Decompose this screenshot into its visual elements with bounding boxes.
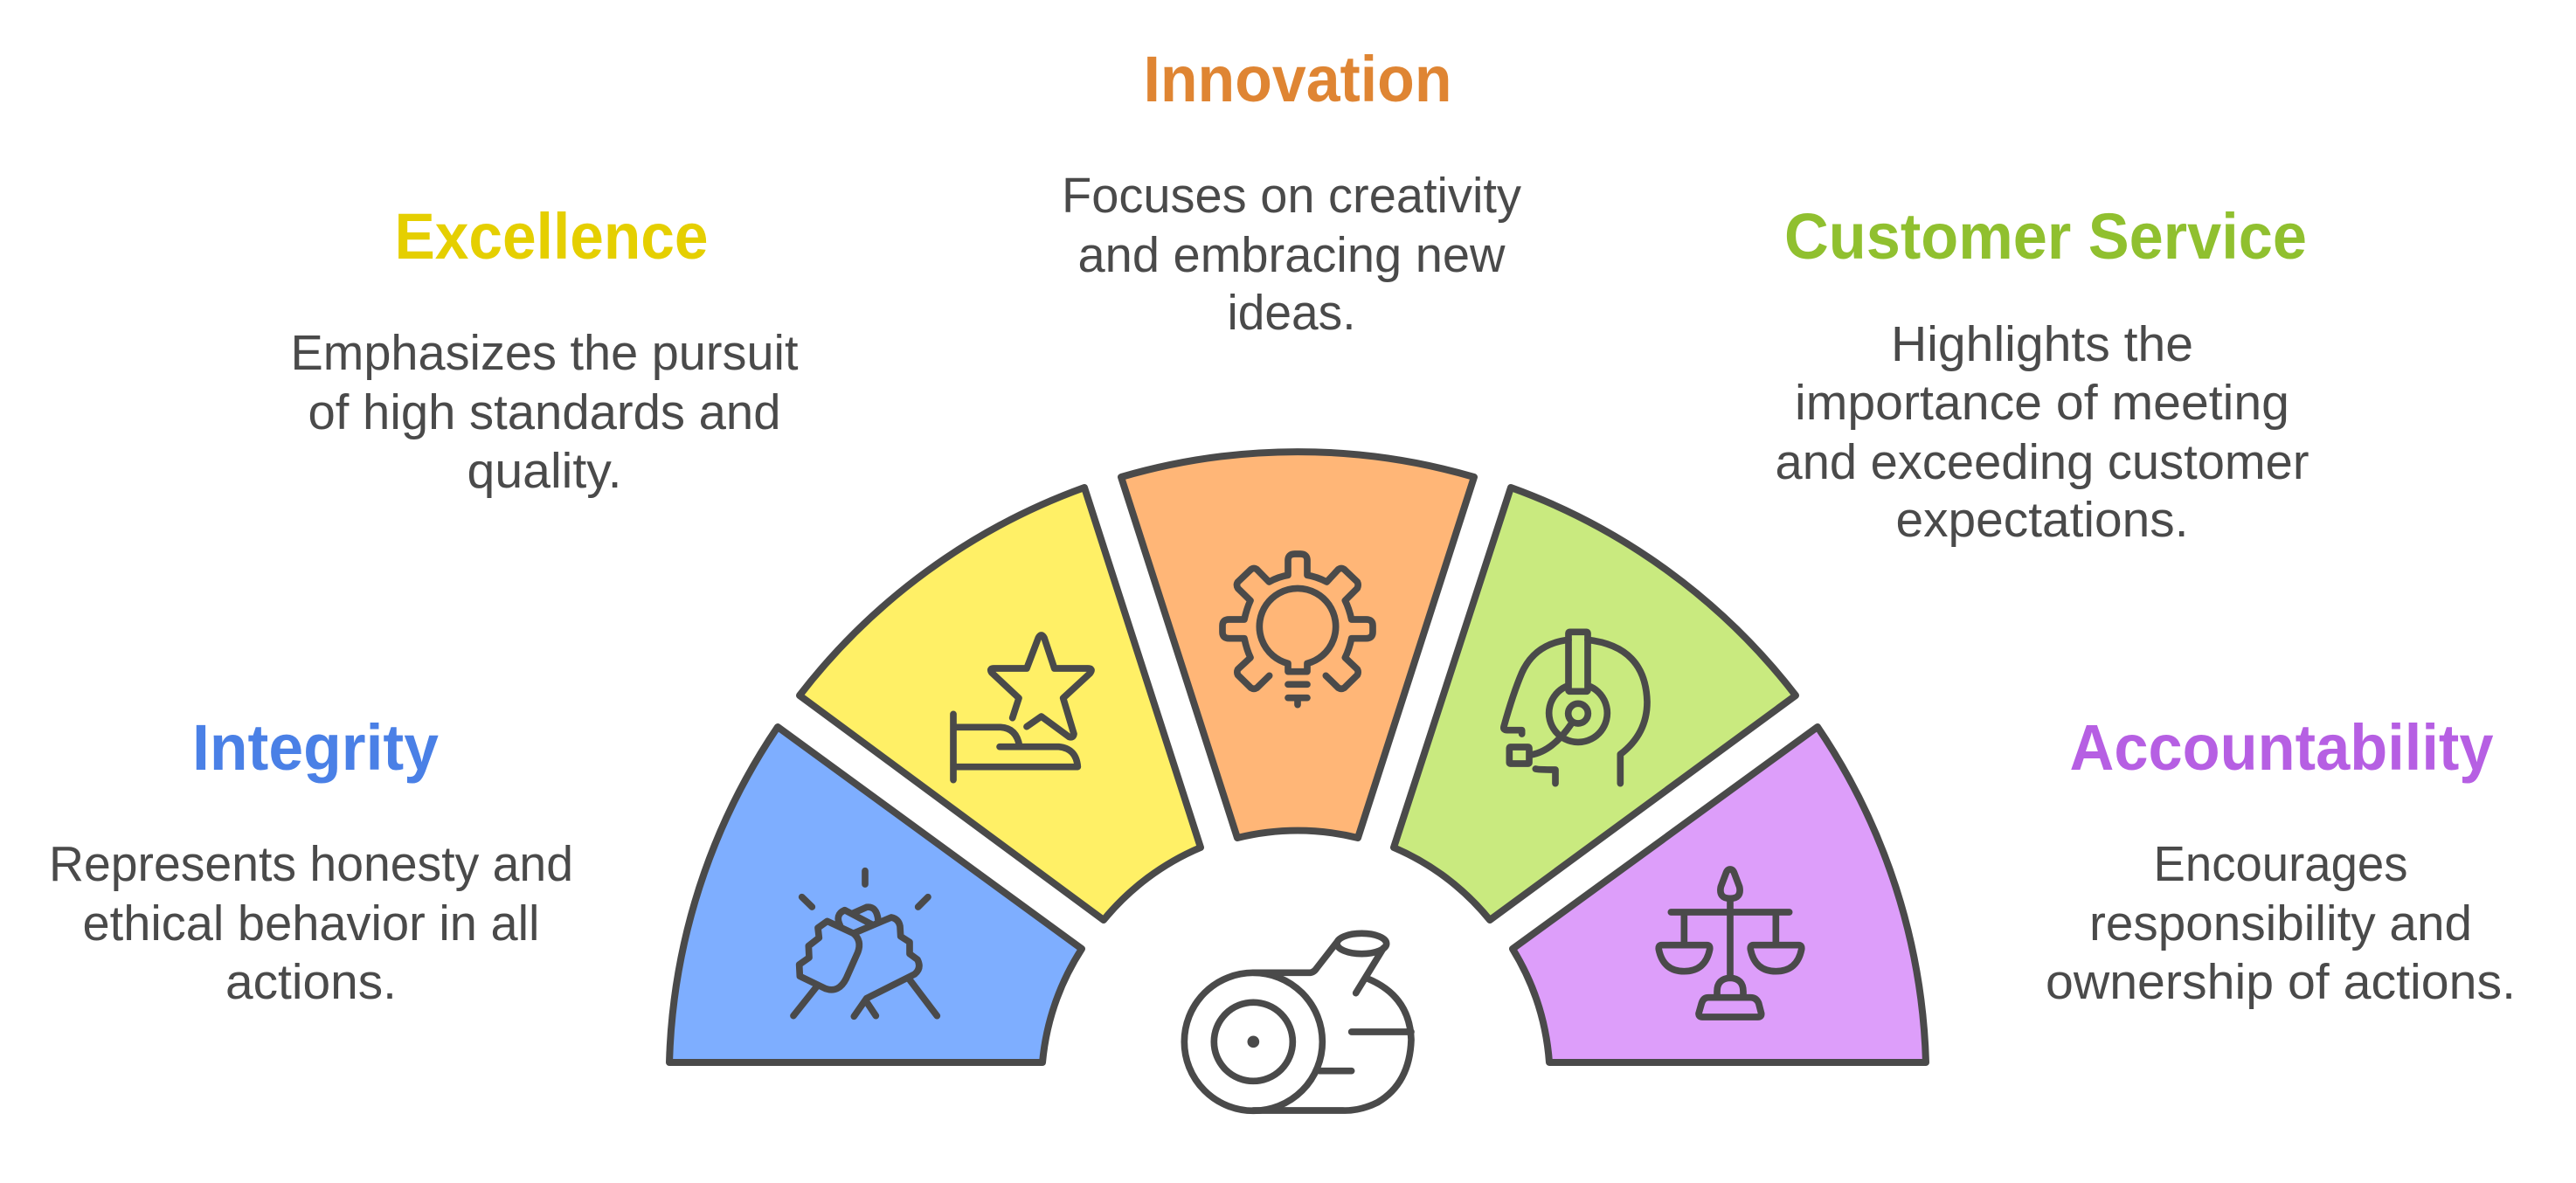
text block: Innovation description: Focuses on creativity [1062, 168, 1521, 224]
panel: Excellence [290, 200, 1201, 920]
text block: Customer Service description: importance of meeting [1795, 375, 2289, 431]
text block: Excellence description: quality. [467, 443, 622, 499]
text block: Excellence description [290, 325, 799, 499]
text block: Customer Service description: Highlights the [1891, 316, 2193, 372]
text block: Accountability description [2046, 836, 2516, 1010]
heading: Excellence: Excellence [395, 200, 708, 273]
text block: Customer Service description: and exceeding customer [1776, 434, 2309, 490]
panel: Integrity [49, 711, 1082, 1062]
text block: Accountability description: responsibility and [2089, 896, 2472, 951]
text block: Innovation description: and embracing new [1078, 227, 1506, 283]
heading: Accountability: Accountability [2069, 711, 2494, 784]
icon: central tree log [1184, 933, 1411, 1110]
text block: Innovation description [1062, 168, 1521, 341]
segment: green [1394, 488, 1796, 920]
text block: Accountability description: Encourages [2153, 836, 2408, 892]
panel: Innovation [1062, 43, 1521, 838]
icon: gear with light bulb [1222, 554, 1373, 705]
text block: Integrity description: actions. [225, 954, 397, 1010]
text block: Integrity description [49, 836, 573, 1010]
heading: Integrity: Integrity [192, 711, 439, 784]
text block: Customer Service description: expectations. [1896, 492, 2188, 548]
segment: orange [1121, 452, 1474, 838]
text block: Excellence description: of high standards and [308, 384, 781, 440]
heading: Innovation: Innovation [1143, 43, 1452, 115]
text block: Customer Service description [1776, 316, 2309, 548]
panel: Customer Service [1394, 200, 2309, 920]
icon: balance scales [1658, 869, 1802, 1017]
text block: Excellence description: Emphasizes the pursuit [290, 325, 799, 381]
text block: Integrity description: ethical behavior in all [82, 896, 540, 951]
icon: clasped hands [793, 871, 937, 1016]
segment: yellow [800, 488, 1201, 920]
icon: star over hand [953, 635, 1091, 780]
text block: Accountability description: ownership of actions. [2046, 954, 2516, 1010]
segment: blue [669, 727, 1082, 1062]
text block: Integrity description: Represents honesty and [49, 836, 573, 892]
heading: Customer Service: Customer Service [1784, 200, 2307, 273]
text block: Innovation description: ideas. [1227, 285, 1356, 341]
icon: headset agent [1504, 632, 1647, 784]
segment: purple [1513, 727, 1926, 1062]
panel: Accountability [1513, 711, 2516, 1062]
